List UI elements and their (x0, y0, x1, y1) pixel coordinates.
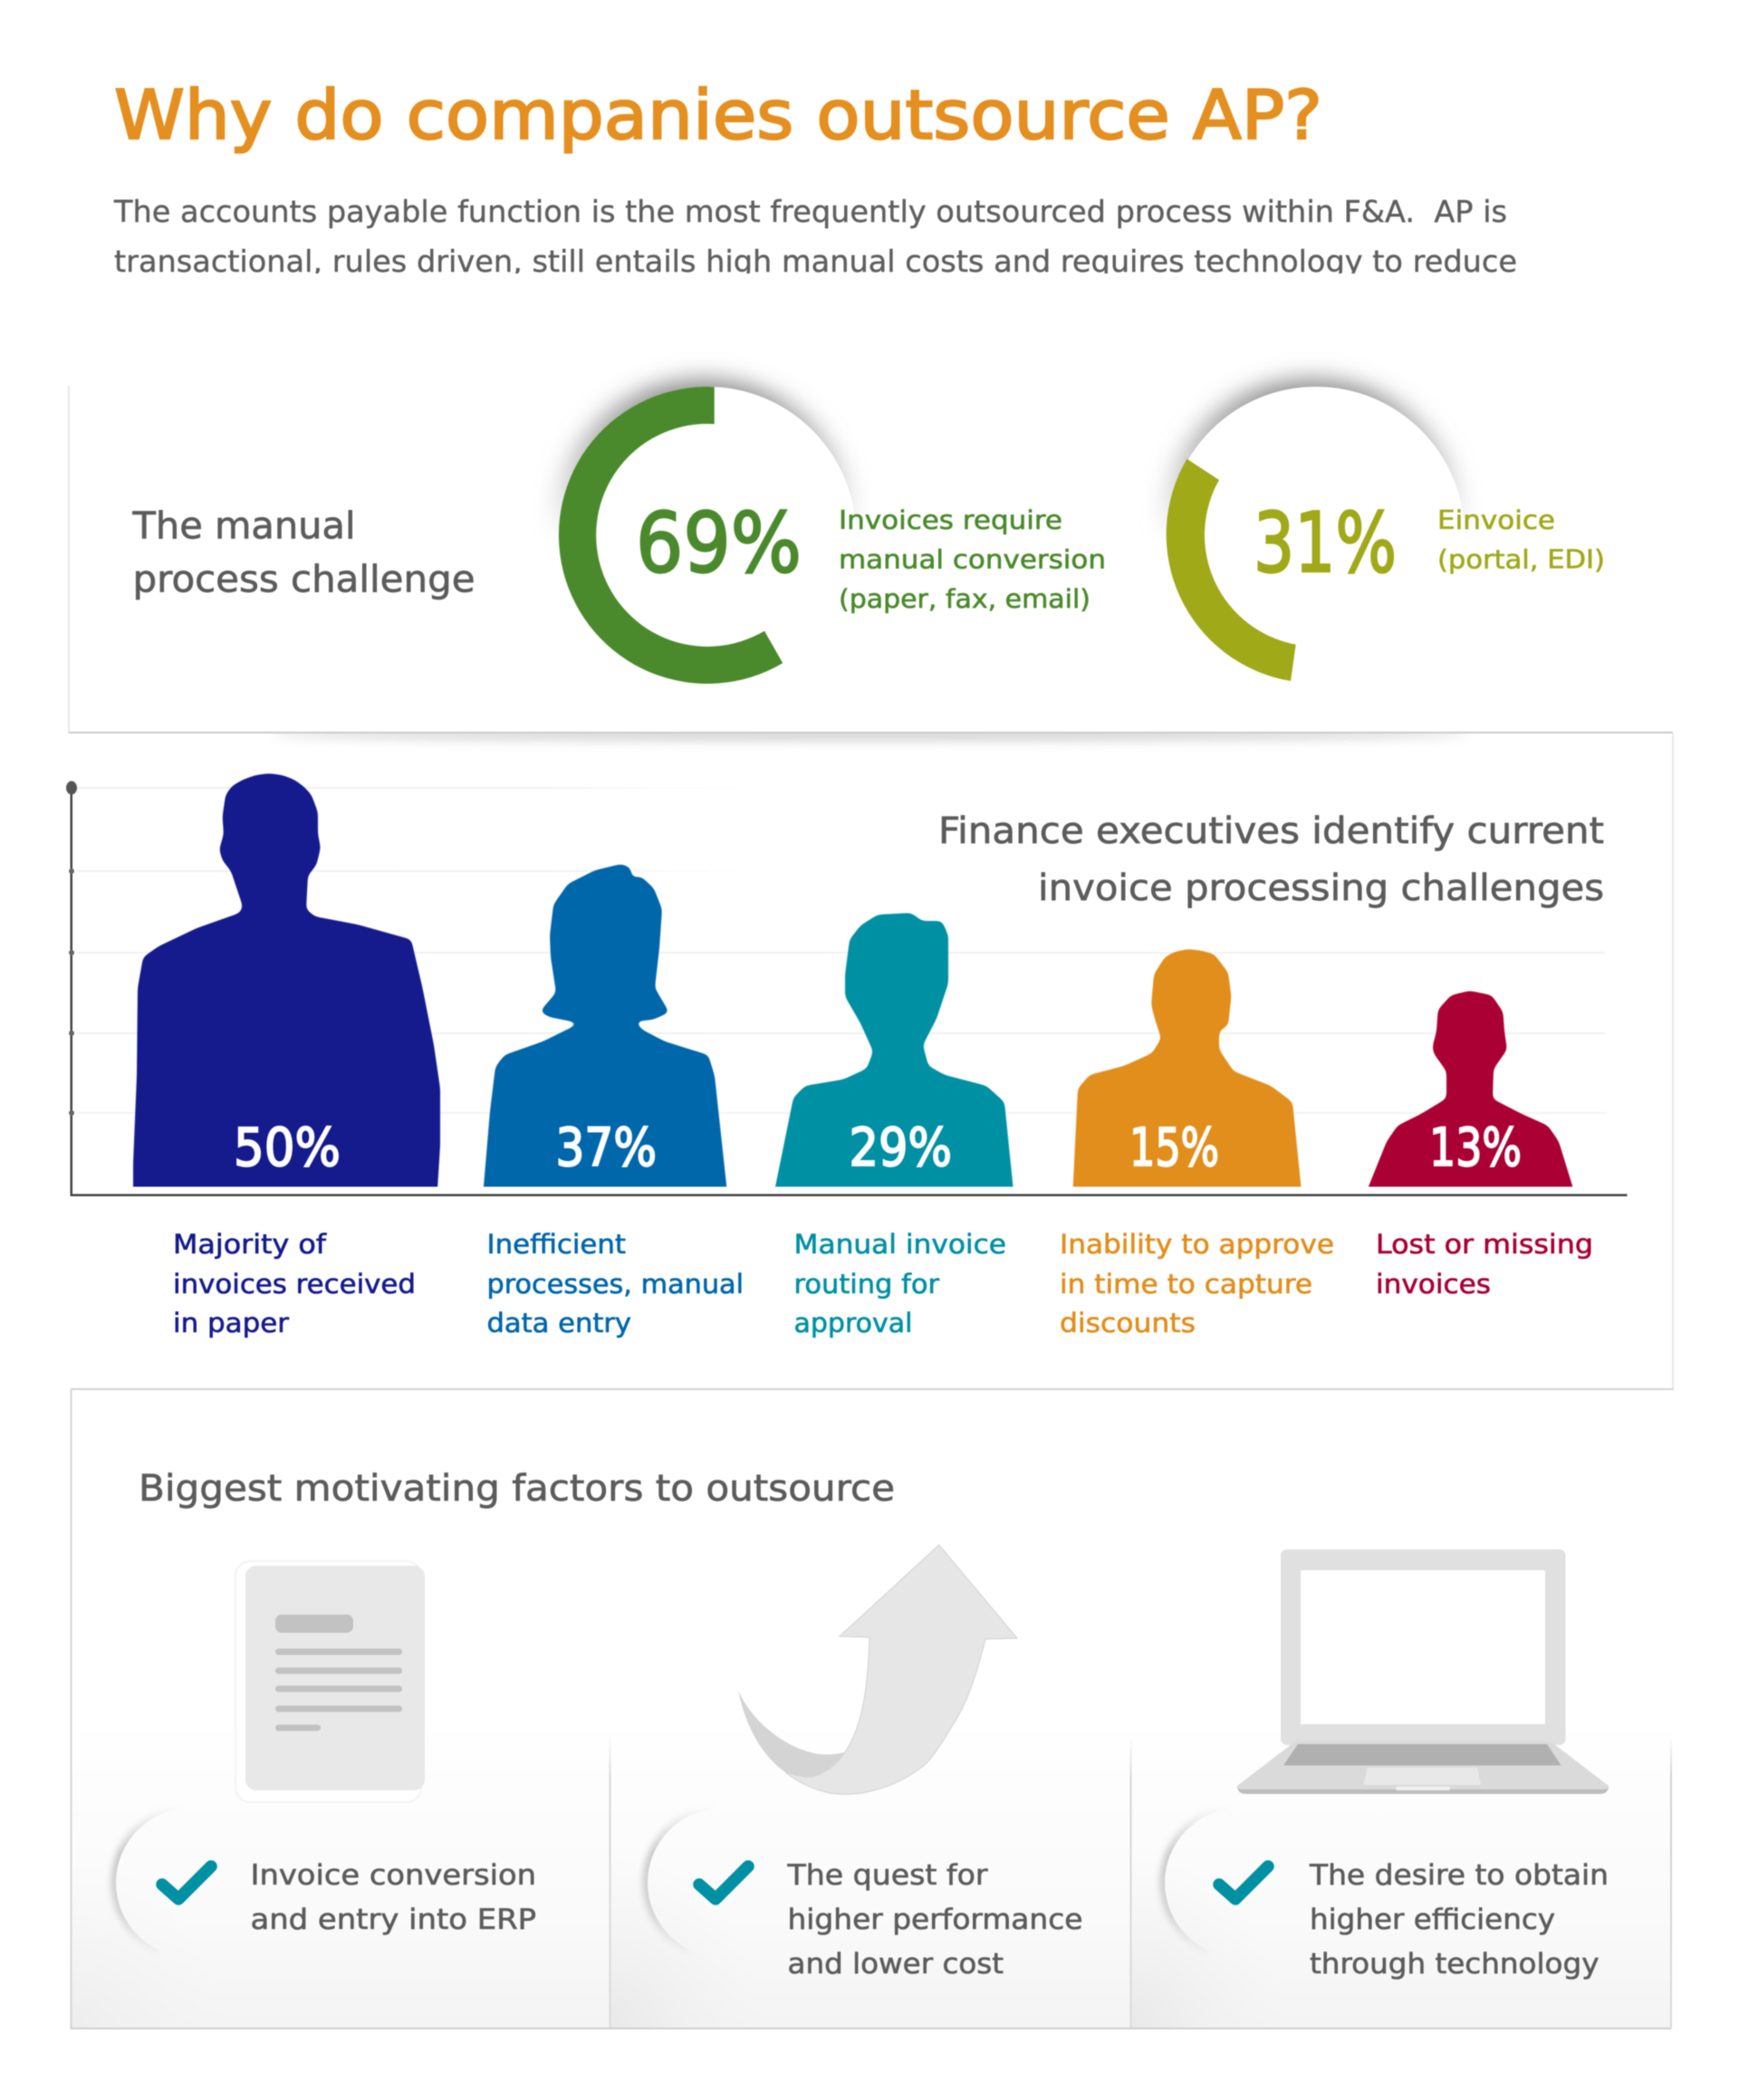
label: inability to approve in time to capture discounts: in time to capture (1060, 1269, 1312, 1299)
callout: higher performance (648, 1809, 1083, 1980)
text: invoice conversion: and entry into ERP (250, 1903, 536, 1936)
label: inefficient processes, manual data entry (487, 1229, 744, 1338)
silhouette: 29 percent: 29% (850, 1117, 952, 1178)
heading: biggest motivating factors: Biggest motivating factors to outsource (139, 1466, 895, 1510)
silhouette: 15 percent: 15% (1129, 1117, 1219, 1178)
icon: check mark (162, 1866, 211, 1899)
label: inefficient processes, manual data entry: processes, manual (487, 1269, 744, 1299)
icon: laptop (1237, 1549, 1609, 1794)
text: quest for higher performance: higher performance (788, 1903, 1083, 1936)
silhouette: 29 percent (774, 912, 1014, 1188)
callout: invoice conversion (116, 1809, 536, 1951)
label: manual invoice routing for approval (793, 1229, 1006, 1338)
silhouette: 50 percent (133, 773, 440, 1218)
label: 69 percent description (839, 505, 1106, 614)
label: 31 percent description: (portal, EDI) (1437, 545, 1605, 574)
label: lost or missing invoices: invoices (1376, 1269, 1491, 1299)
silhouette: 37 percent: 37% (556, 1117, 657, 1178)
heading: the manual process challenge (131, 503, 475, 601)
text: quest for higher performance: and lower cost (788, 1948, 1004, 1980)
label: 69 percent description: manual conversion (839, 545, 1106, 574)
heading: the manual process challenge: The manual (131, 503, 355, 547)
label: inability to approve in time to capture discounts: Inability to approve (1060, 1229, 1334, 1260)
label: majority of invoices received in paper (173, 1229, 416, 1338)
chart heading (938, 809, 1604, 909)
icon: check mark (1219, 1866, 1268, 1899)
text: desire for efficiency: through technology (1310, 1948, 1600, 1980)
label: majority of invoices received in paper: invoices received (173, 1269, 416, 1299)
label: inefficient processes, manual data entry: data entry (487, 1308, 631, 1338)
heading: the manual process challenge: process challenge (132, 558, 475, 601)
donut chart: 69 percent: 69% (636, 496, 802, 591)
donut chart: 69 percent (554, 379, 856, 684)
chart heading: Finance executives identify current (938, 809, 1604, 852)
label: 69 percent description: Invoices require (839, 505, 1062, 535)
silhouette: 13 percent (1368, 991, 1574, 1188)
label: lost or missing invoices: Lost or missing (1376, 1229, 1593, 1260)
panel: invoice processing challenges (66, 734, 1674, 1396)
intro paragraph (112, 198, 1516, 274)
text: invoice conversion: Invoice conversion (250, 1859, 536, 1892)
text: desire for efficiency: The desire to obtain (1309, 1859, 1609, 1892)
label: inability to approve in time to capture discounts: discounts (1060, 1308, 1196, 1338)
title: Why do companies outsource AP? (114, 75, 1322, 155)
silhouette: 37 percent (483, 864, 727, 1188)
label: 31 percent description: Einvoice (1437, 505, 1555, 535)
callout: higher efficiency (1165, 1809, 1609, 1980)
donut chart: 31 percent (1163, 379, 1465, 684)
chart gridlines and axes (66, 781, 1627, 1196)
text: quest for higher performance: The quest for (786, 1859, 988, 1892)
panel: biggest motivating factors (71, 1389, 1672, 2029)
intro paragraph: transactional, rules driven, still entails high manual costs and requires technology to reduce (114, 244, 1517, 279)
text: desire for efficiency (1309, 1859, 1609, 1980)
label: inefficient processes, manual data entry: Inefficient (487, 1229, 626, 1260)
panel: manual process challenge (68, 379, 1673, 741)
icon: check mark (699, 1866, 748, 1899)
label: 31 percent description (1437, 505, 1605, 574)
silhouette: 15 percent (1072, 949, 1302, 1188)
donut chart: 31 percent: 31% (1254, 496, 1397, 591)
label: majority of invoices received in paper: in paper (173, 1308, 289, 1338)
silhouette: 50 percent: 50% (234, 1117, 341, 1178)
text: invoice conversion (250, 1859, 536, 1936)
label: manual invoice routing for approval: routing for (793, 1269, 939, 1299)
label: manual invoice routing for approval: Manual invoice (793, 1229, 1006, 1260)
text: desire for efficiency: higher efficiency (1310, 1903, 1555, 1936)
silhouette: 13 percent: 13% (1429, 1117, 1522, 1178)
icon: upward curved arrow (738, 1545, 1017, 1794)
text: quest for higher performance (786, 1859, 1083, 1980)
label: inability to approve in time to capture discounts (1060, 1229, 1334, 1338)
label: 69 percent description: (paper, fax, email) (839, 584, 1090, 614)
label: manual invoice routing for approval: approval (793, 1308, 913, 1338)
intro paragraph: The accounts payable function is the most frequently outsourced process within F&A. AP is (113, 194, 1507, 229)
label: lost or missing invoices (1376, 1229, 1593, 1299)
chart heading: invoice processing challenges (1038, 866, 1604, 909)
label: majority of invoices received in paper: Majority of (173, 1229, 327, 1260)
icon: document (235, 1561, 425, 1802)
